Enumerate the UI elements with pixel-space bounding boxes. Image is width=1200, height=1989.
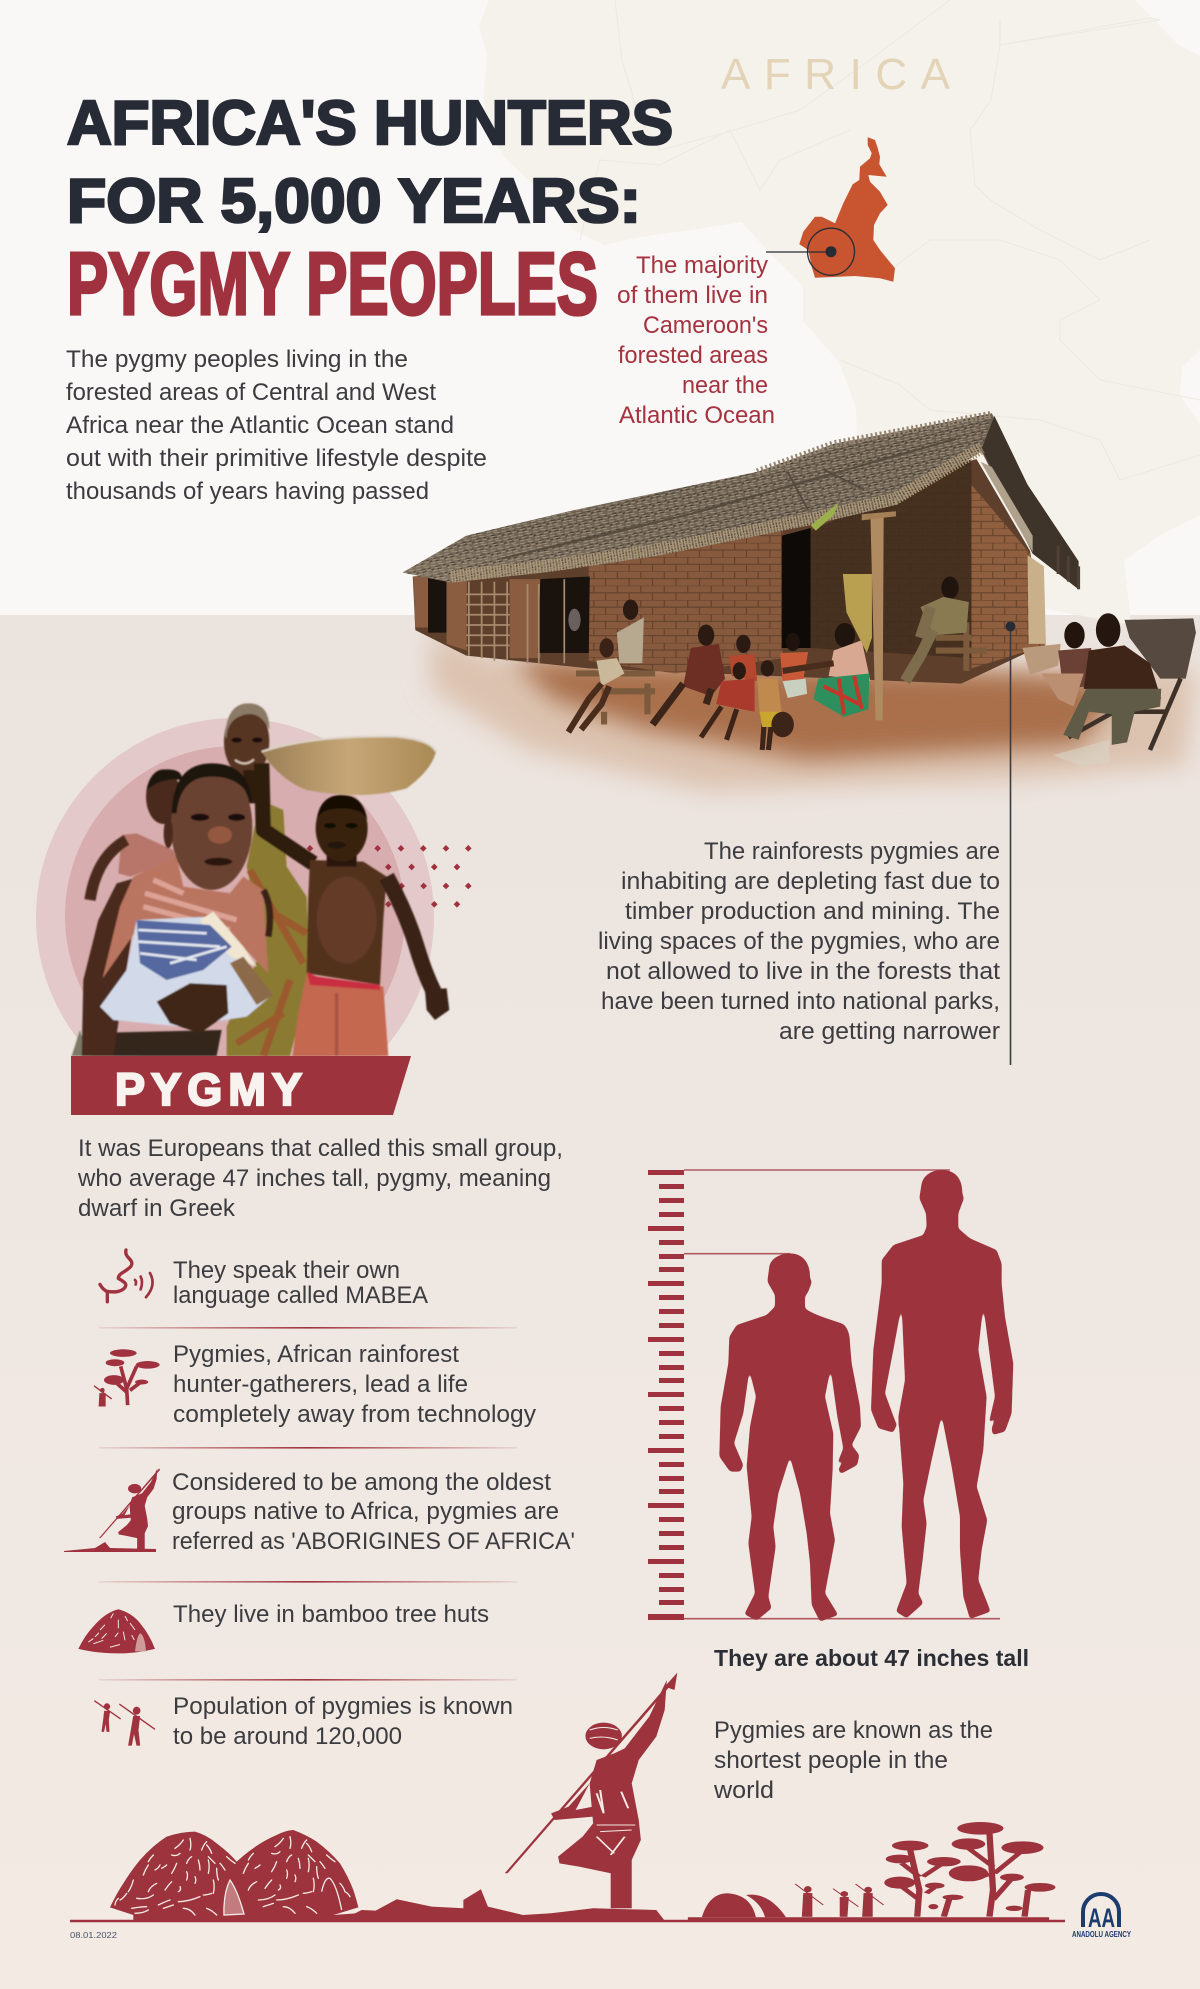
fact: language: language called MABEA bbox=[173, 1282, 428, 1309]
logo: Anadolu Agency: ANADOLU AGENCY bbox=[1072, 1930, 1132, 1939]
text: rainforests depleting: timber production and mining. The bbox=[625, 898, 1000, 925]
walls bbox=[413, 459, 1045, 684]
text: shortest people: Pygmies are known as the bbox=[714, 1717, 993, 1744]
callout: Cameroon: The majority bbox=[636, 252, 769, 279]
callout: Cameroon: near the bbox=[682, 372, 768, 399]
back woman bbox=[224, 703, 310, 1056]
icon: tree and person bbox=[94, 1349, 160, 1406]
small hunters bbox=[795, 1884, 884, 1917]
benches bbox=[576, 622, 987, 724]
trees bbox=[884, 1822, 1055, 1917]
text: origin of the word pygmy: dwarf in Greek bbox=[78, 1195, 236, 1222]
callout: Cameroon: Atlantic Ocean bbox=[619, 402, 775, 429]
text: rainforests depleting: The rainforests pygmies are bbox=[704, 838, 1000, 865]
map of Africa bbox=[479, 0, 1200, 625]
woman and kids under porch bbox=[568, 574, 872, 750]
icon: hunter with spear bbox=[99, 1468, 160, 1551]
photo: pygmy children bbox=[72, 703, 449, 1056]
dotted pattern bbox=[307, 845, 472, 908]
bottom silhouette scene bbox=[70, 1673, 1065, 1921]
height chart bbox=[648, 1170, 1013, 1622]
text: rainforests depleting: living spaces of the pygmies, who are bbox=[598, 928, 1000, 955]
text: rainforests depleting: have been turned into national parks, bbox=[601, 988, 1000, 1015]
fact: language bbox=[173, 1257, 428, 1309]
fact: population: Population of pygmies is known bbox=[173, 1693, 513, 1720]
intro text: Africa near the Atlantic Ocean stand bbox=[66, 412, 454, 439]
photo: village hut with people bbox=[403, 413, 1196, 791]
large hunter with spear bbox=[505, 1673, 677, 1908]
title bbox=[67, 89, 673, 333]
thatch fringe bbox=[451, 414, 1079, 589]
icon: speaking head bbox=[100, 1250, 153, 1302]
thatched roof bbox=[403, 413, 1079, 589]
intro text bbox=[66, 346, 487, 505]
banner: PYGMY bbox=[71, 1056, 411, 1115]
bamboo lattice bbox=[466, 579, 564, 663]
post bbox=[870, 515, 884, 720]
callout: Cameroon: of them live in bbox=[617, 282, 768, 309]
fact: population: to be around 120,000 bbox=[173, 1723, 402, 1750]
vertical callout line bbox=[1006, 622, 1016, 1065]
front child bbox=[72, 763, 273, 1056]
fact: population bbox=[173, 1693, 513, 1750]
callout: Cameroon: Cameroon's bbox=[643, 312, 768, 339]
men and wheelbarrow on the right bbox=[1022, 613, 1196, 765]
intro text: The pygmy peoples living in the bbox=[66, 346, 408, 373]
banner: PYGMY: PYGMY bbox=[115, 1064, 302, 1115]
title: FOR 5,000 YEARS: bbox=[67, 167, 641, 236]
text: origin of the word pygmy: It was Europeans that called this small group, bbox=[78, 1135, 563, 1162]
text: rainforests depleting: are getting narrower bbox=[779, 1018, 1000, 1045]
Cameroon map shape with marker bbox=[766, 137, 895, 282]
seated man on bench bbox=[905, 577, 969, 681]
title: PYGMY PEOPLES bbox=[67, 234, 598, 333]
fact: language: They speak their own bbox=[173, 1257, 400, 1284]
fact: huts: They live in bamboo tree huts bbox=[173, 1601, 489, 1628]
height label: They are about 47 inches tall bbox=[714, 1645, 1029, 1671]
fact: aborigines: groups native to Africa, pygmies are bbox=[172, 1498, 559, 1525]
fact: technology: hunter-gatherers, lead a life bbox=[173, 1371, 468, 1398]
callout: Cameroon bbox=[617, 252, 775, 429]
intro text: thousands of years having passed bbox=[66, 478, 429, 505]
boy with bowl bbox=[262, 763, 449, 1056]
text: rainforests depleting bbox=[598, 838, 1000, 1045]
title: AFRICA'S HUNTERS bbox=[67, 89, 673, 158]
tall man silhouette bbox=[871, 1170, 1013, 1619]
twin huts bbox=[110, 1830, 380, 1920]
intro text: out with their primitive lifestyle despite bbox=[66, 445, 487, 472]
list of facts bbox=[64, 1250, 575, 1750]
logo: Anadolu Agency bbox=[1072, 1894, 1132, 1939]
logo: Anadolu Agency: AA bbox=[1088, 1903, 1115, 1933]
fact: technology bbox=[173, 1341, 536, 1428]
ruler ticks bbox=[648, 1170, 684, 1620]
date: 08.01.2022 bbox=[70, 1930, 117, 1940]
fact: aborigines: referred as 'ABORIGINES OF AFRICA' bbox=[172, 1528, 575, 1555]
short man silhouette bbox=[719, 1253, 861, 1622]
text: rainforests depleting: inhabiting are depleting fast due to bbox=[621, 868, 1000, 895]
fact: aborigines bbox=[172, 1469, 575, 1555]
icon ground line bbox=[64, 1542, 156, 1552]
fact: technology: completely away from technology bbox=[173, 1401, 536, 1428]
intro text: forested areas of Central and West bbox=[66, 379, 436, 406]
text: origin of the word pygmy: who average 47 inches tall, pygmy, meaning bbox=[77, 1165, 551, 1192]
bowl bbox=[262, 737, 436, 795]
icon: two hunters bbox=[94, 1701, 155, 1745]
back child bbox=[90, 769, 182, 900]
text: shortest people: shortest people in the bbox=[714, 1747, 948, 1774]
text: shortest people bbox=[713, 1717, 993, 1804]
label: AFRICA: AFRICA bbox=[721, 50, 951, 99]
decorative circles behind children photo bbox=[36, 718, 434, 1056]
small huts bbox=[688, 1893, 1049, 1921]
fact: aborigines: Considered to be among the oldest bbox=[172, 1469, 551, 1496]
ground bbox=[341, 1889, 665, 1921]
text: shortest people: world bbox=[713, 1777, 774, 1804]
fact: technology: Pygmies, African rainforest bbox=[173, 1341, 459, 1368]
text: origin of the word pygmy bbox=[77, 1135, 563, 1222]
callout: Cameroon: forested areas bbox=[618, 342, 768, 369]
icon: hut bbox=[78, 1609, 155, 1653]
text: rainforests depleting: not allowed to live in the forests that bbox=[606, 958, 1000, 985]
